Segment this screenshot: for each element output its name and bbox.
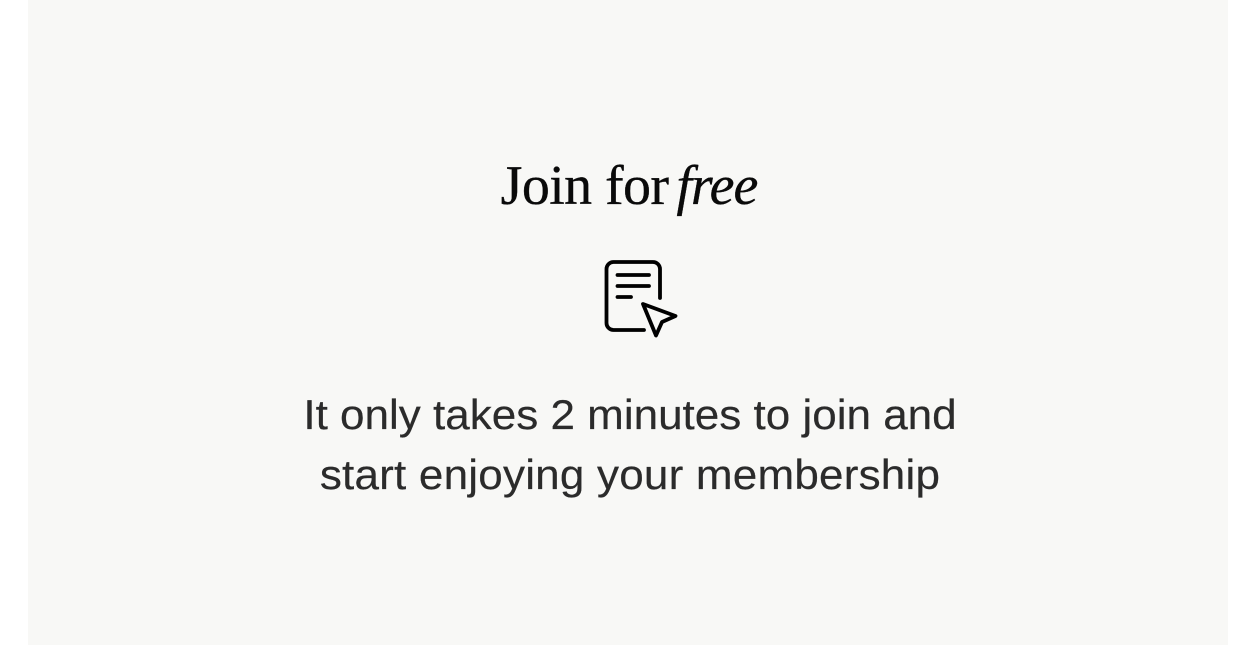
title: Join for free bbox=[501, 155, 757, 217]
icon: document with cursor bbox=[604, 260, 678, 338]
text block: description: It only takes 2 minutes to join and bbox=[303, 391, 957, 438]
text block: description bbox=[303, 391, 957, 498]
text block: description: start enjoying your membership bbox=[320, 451, 940, 498]
